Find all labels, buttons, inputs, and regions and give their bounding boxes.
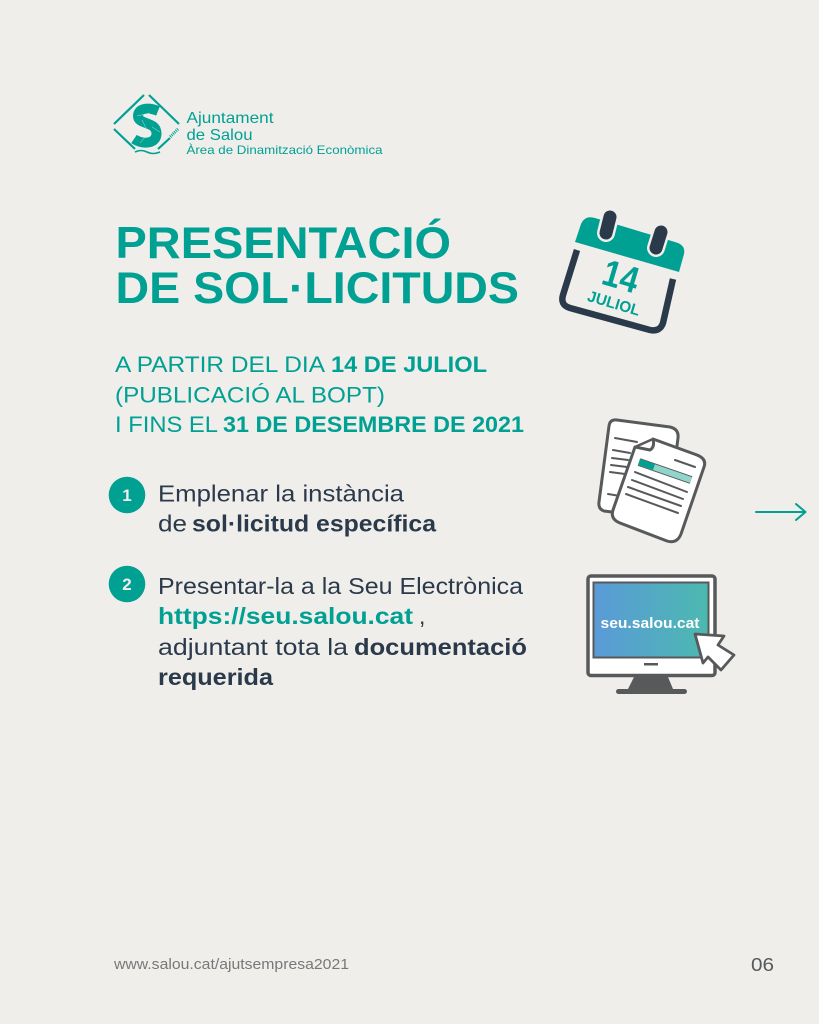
icon: documents <box>599 420 705 542</box>
step 1 text <box>158 480 436 536</box>
step 2 text: documentació <box>354 634 527 660</box>
step 2 <box>109 566 527 690</box>
date range text <box>115 352 524 437</box>
logo text: Ajuntament <box>186 110 274 127</box>
page number: 06 <box>751 955 774 975</box>
step 2 text <box>158 573 527 690</box>
screen label: seu.salou.cat <box>600 615 700 632</box>
icon: cursor <box>695 634 734 670</box>
step 2 text: requerida <box>158 664 273 690</box>
arrow <box>756 504 806 520</box>
step 1 badge: 1 <box>122 486 132 505</box>
step 2 text: https://seu.salou.cat <box>158 603 413 629</box>
date range text: (PUBLICACIÓ AL BOPT) <box>115 382 385 408</box>
icon: calendar 14 juliol <box>562 217 684 330</box>
step 2 badge <box>109 566 145 602</box>
icon: calendar 14 juliol: 14 <box>598 252 644 301</box>
step 1 badge <box>109 477 145 513</box>
icon: calendar 14 juliol: JULIOL <box>585 288 642 320</box>
footer url: www.salou.cat/ajutsempresa2021 <box>113 956 349 973</box>
step 2 text: Presentar-la a la Seu Electrònica <box>158 573 523 599</box>
step 1 text: de <box>158 510 187 536</box>
logo text <box>186 110 383 157</box>
step 1 <box>109 477 436 536</box>
step 1 text: sol·licitud específica <box>192 510 436 536</box>
title <box>116 218 519 313</box>
date range text: A PARTIR DEL DIA <box>115 352 325 377</box>
step 2 text: adjuntant tota la <box>158 634 348 660</box>
title: DE SOL·LICITUDS <box>116 264 519 313</box>
date range text: 31 DE DESEMBRE DE 2021 <box>223 412 524 437</box>
logo: Ajuntament de Salou <box>114 95 383 157</box>
step 2 text: , <box>419 603 425 629</box>
icon: computer monitor <box>588 576 734 694</box>
logo text: Àrea de Dinamització Econòmica <box>186 142 383 157</box>
logo text: de Salou <box>186 127 252 144</box>
date range text: I FINS EL <box>115 412 218 437</box>
step 2 badge: 2 <box>122 575 132 594</box>
step 1 text: Emplenar la instància <box>158 480 404 506</box>
title: PRESENTACIÓ <box>116 218 451 268</box>
icon: diamond S emblem <box>114 95 179 154</box>
date range text: 14 DE JULIOL <box>331 352 487 377</box>
